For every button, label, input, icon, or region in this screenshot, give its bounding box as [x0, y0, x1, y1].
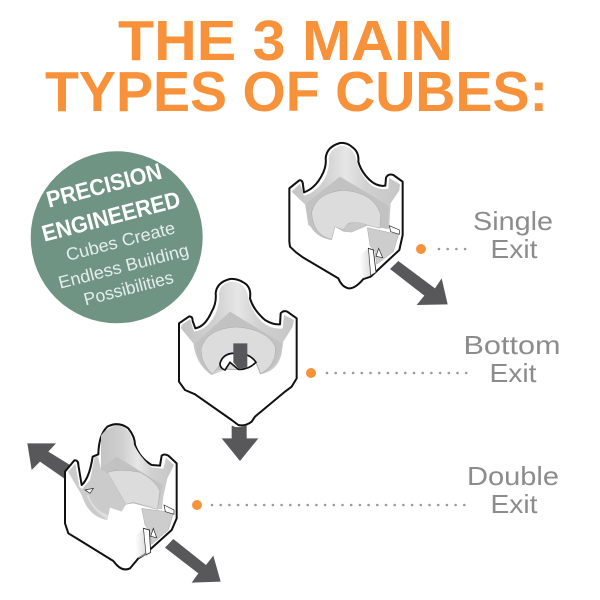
leader: bottom exit: [306, 368, 467, 378]
label: bottom exit: [464, 330, 560, 388]
badge: precision engineered: Endless Building: [56, 240, 191, 293]
label: double exit: Exit: [490, 489, 538, 519]
disc: [312, 190, 381, 239]
label: double exit: [467, 461, 559, 519]
label: single exit: Exit: [490, 234, 538, 264]
disc: [201, 327, 275, 374]
cube: double exit: [27, 424, 221, 583]
back wall: [181, 282, 294, 375]
label: bottom exit: Exit: [490, 358, 537, 388]
label: double exit: Double: [467, 461, 559, 491]
floor: [195, 312, 282, 375]
cube: bottom exit: [179, 279, 297, 461]
label: bottom exit: Bottom: [464, 330, 560, 360]
title: THE 3 MAIN: [118, 9, 453, 73]
arrow: [390, 261, 448, 305]
back wall: [292, 146, 400, 240]
tab: [368, 248, 376, 276]
arrow: [222, 425, 258, 461]
floor: [306, 177, 389, 240]
center hole with arrow: [220, 353, 256, 370]
floor: [101, 457, 163, 510]
left exit opening: [68, 456, 126, 520]
right exit opening: [142, 508, 173, 544]
badge: precision engineered: PRECISION: [44, 158, 164, 213]
badge: precision engineered: ENGINEERED: [39, 186, 183, 247]
badge: precision engineered: Cubes Create: [64, 217, 177, 265]
title: TYPES OF CUBES:: [45, 60, 548, 124]
leader: double exit: [192, 500, 467, 510]
cube: single exit: [289, 143, 448, 305]
badge: precision engineered: [31, 151, 203, 323]
back wall: [101, 425, 174, 509]
label: single exit: Single: [473, 206, 553, 236]
arrow: back left: [27, 443, 70, 479]
label: single exit: [473, 206, 553, 264]
leader: single exit: [416, 244, 468, 254]
right exit opening: [367, 228, 399, 264]
title: [45, 9, 548, 124]
badge: precision engineered: Possibilities: [81, 267, 176, 309]
floor hole: [343, 222, 366, 232]
tab: [143, 528, 151, 555]
disc: [107, 470, 160, 509]
arrow: front right: [165, 539, 221, 583]
